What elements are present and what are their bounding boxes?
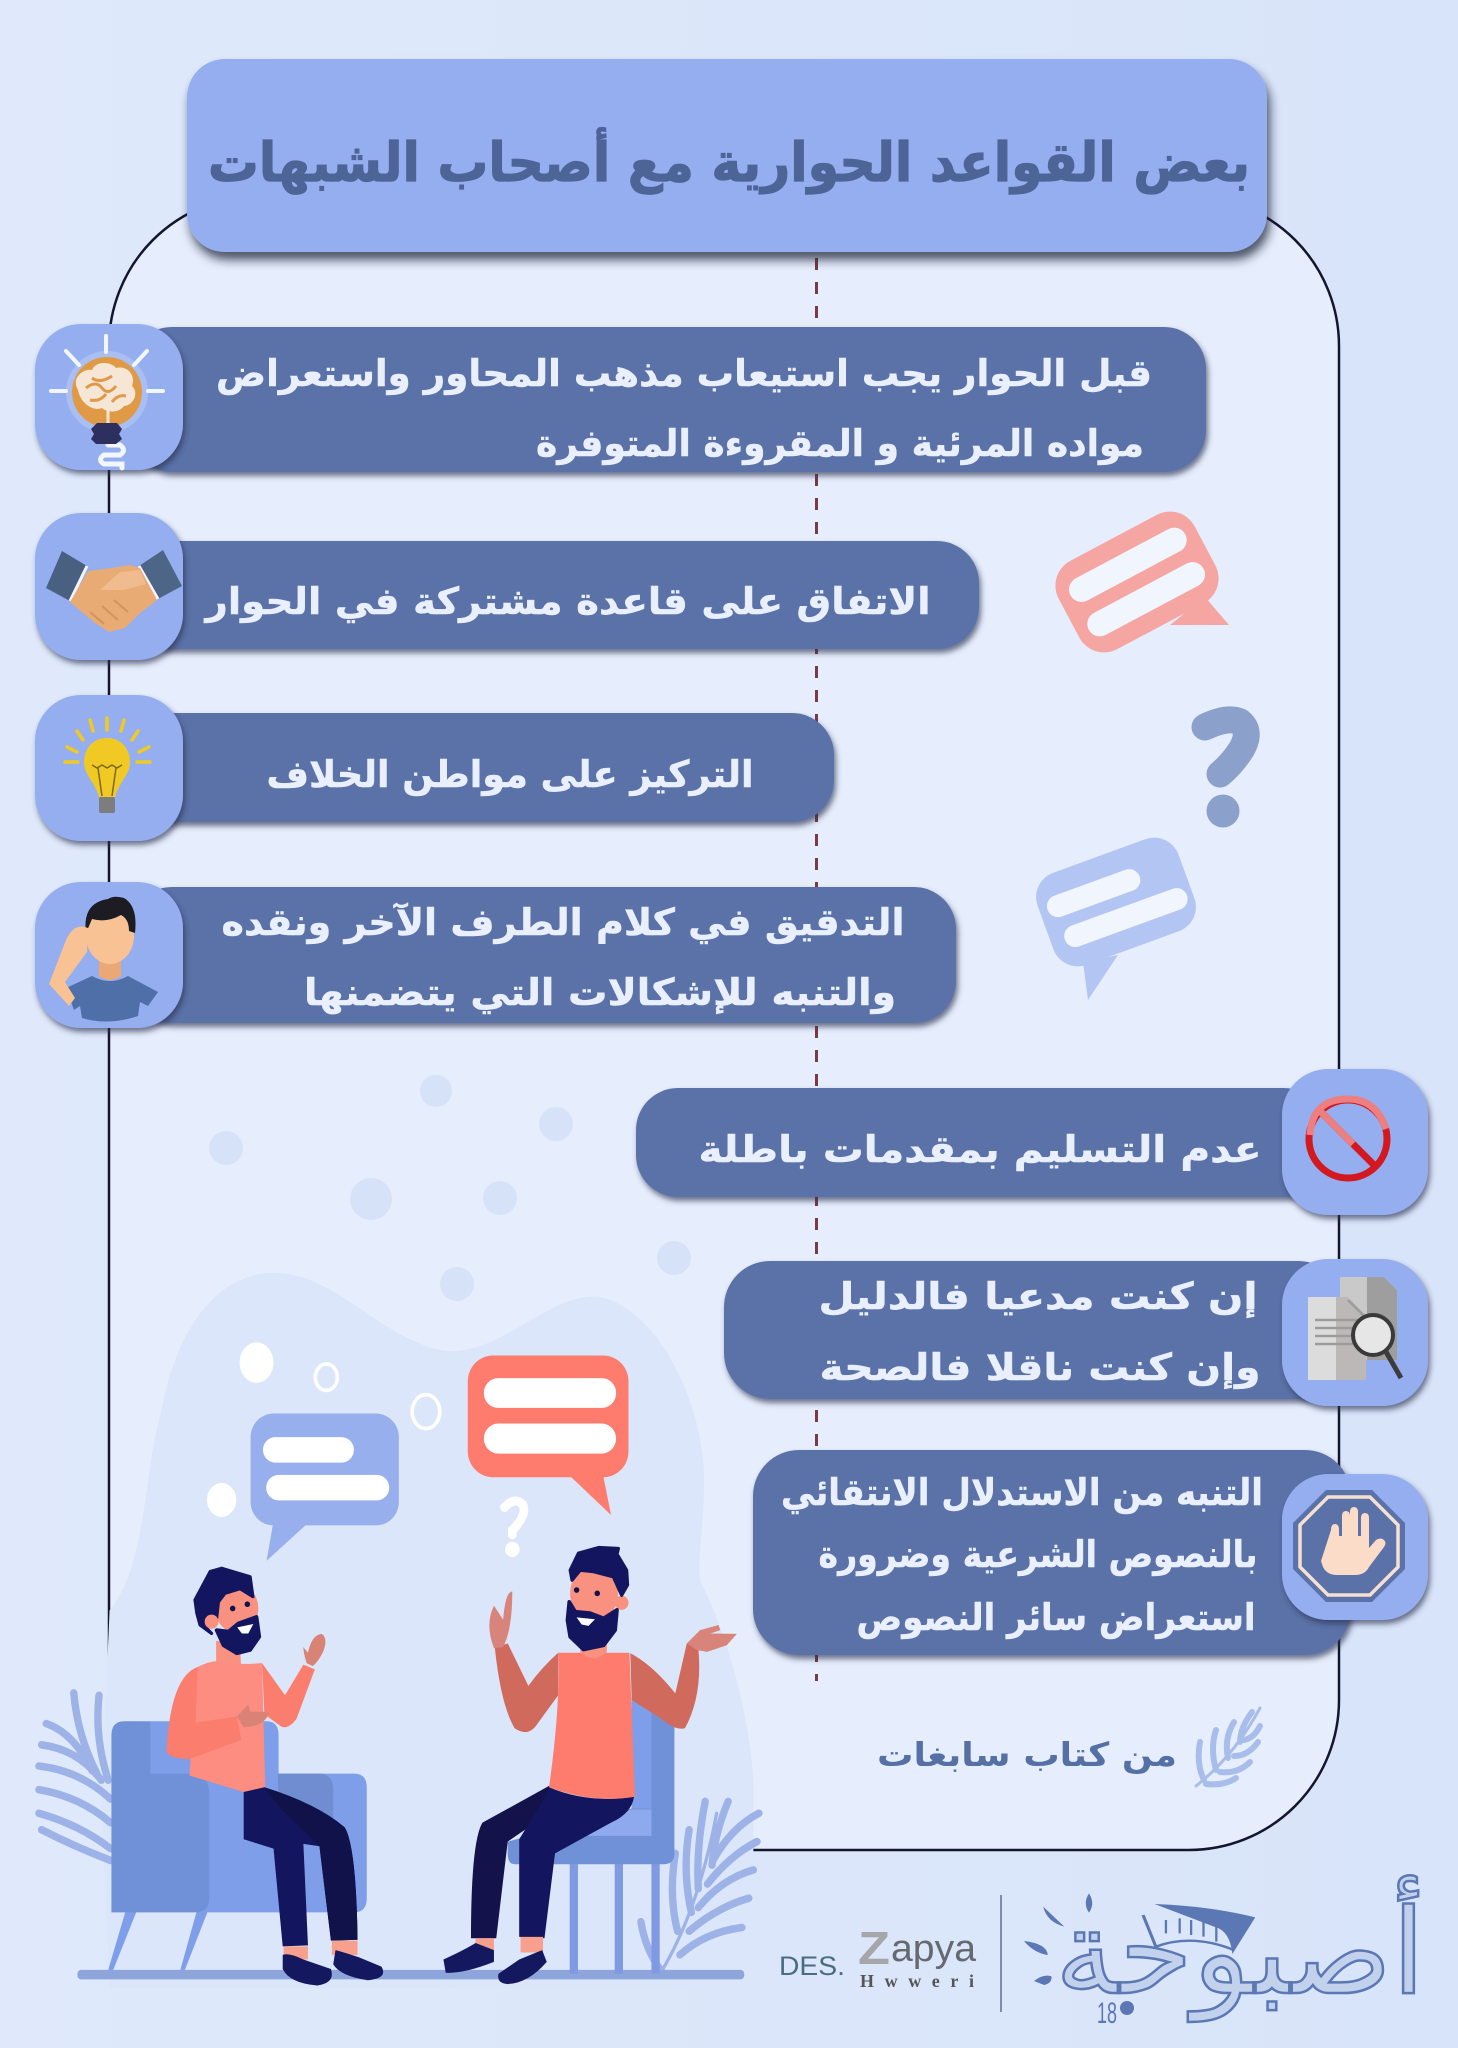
ground line — [77, 1970, 744, 1979]
item 1 — [35, 324, 1206, 472]
item 5 — [636, 1069, 1428, 1215]
icon: thinking person — [35, 882, 183, 1028]
background dots — [209, 1075, 691, 1301]
icon: pink speech bubble — [1046, 502, 1229, 662]
bar 5 — [636, 1088, 1326, 1197]
armchair — [108, 1721, 367, 1970]
speech bubble blue — [251, 1414, 399, 1561]
icon: brain bulb — [35, 324, 183, 470]
icon: documents and magnifier — [1282, 1259, 1428, 1406]
title text: بعض القواعد الحوارية مع أصحاب الشبهات — [208, 127, 1250, 195]
illustration: two men talking — [39, 1273, 759, 1988]
title banner — [187, 59, 1267, 252]
icon: prohibited sign — [1282, 1069, 1428, 1215]
source note — [877, 1708, 1260, 1786]
plant left — [39, 1693, 111, 1860]
item 4 — [35, 882, 956, 1028]
bar 3 — [130, 713, 834, 822]
designer credit: Hwweri — [860, 1971, 980, 1991]
icon: question mark — [1205, 720, 1246, 828]
bar 1 — [130, 327, 1206, 472]
speech bubble coral — [468, 1356, 628, 1515]
chair — [508, 1698, 674, 1974]
bar 3: التركيز على مواطن الخلاف — [266, 753, 754, 796]
bar 7: بالنصوص الشرعية وضرورة — [818, 1533, 1258, 1576]
panel: rounded frame — [109, 196, 1339, 1850]
bubbles and question mark — [207, 1342, 524, 1557]
item 2 — [35, 513, 979, 660]
bar 5: عدم التسليم بمقدمات باطلة — [698, 1128, 1262, 1172]
logo: أصبوحة — [1055, 1875, 1425, 2022]
logo: 18 — [1097, 1997, 1117, 2030]
dashed centre line — [815, 258, 818, 1681]
bar 6: وإن كنت ناقلا فالصحة — [820, 1346, 1260, 1389]
designer credit — [779, 1922, 980, 1991]
icon: feather leaf — [1196, 1708, 1260, 1786]
designer credit: apya — [891, 1928, 977, 1970]
man left — [167, 1568, 383, 1985]
designer credit: DES. — [779, 1951, 845, 1981]
bar 4: التدقيق في كلام الطرف الآخر ونقده — [222, 901, 904, 945]
icon: blue speech bubble — [1029, 830, 1203, 1000]
man right — [443, 1548, 737, 1984]
plant right — [641, 1801, 759, 1971]
bar 6: إن كنت مدعيا فالدليل — [818, 1275, 1258, 1318]
bar 1: قبل الحوار يجب استيعاب مذهب المحاور واستعراض — [216, 352, 1152, 395]
bar 7 — [753, 1450, 1351, 1655]
icon: stop hand — [1282, 1474, 1428, 1620]
item 6 — [724, 1259, 1428, 1406]
backdrop blob — [101, 1273, 753, 1988]
icon: handshake — [35, 513, 183, 660]
bar 7: التنبه من الاستدلال الانتقائي — [781, 1471, 1263, 1514]
bar 6 — [724, 1261, 1344, 1399]
bar 2: الاتفاق على قاعدة مشتركة في الحوار — [203, 580, 930, 623]
bar 7: استعراض سائر النصوص — [856, 1596, 1256, 1639]
bar 1: مواده المرئية و المقروءة المتوفرة — [536, 422, 1144, 465]
designer credit: Z — [858, 1922, 890, 1974]
bar 4: والتنبه للإشكالات التي يتضمنها — [304, 971, 896, 1014]
credits and logo — [779, 1875, 1425, 2030]
bar 4 — [130, 887, 956, 1023]
bar 2 — [130, 541, 979, 649]
item 3 — [35, 695, 834, 841]
source text: من كتاب سابغات — [877, 1735, 1177, 1775]
icon: light bulb — [35, 695, 183, 841]
vertical divider — [1000, 1895, 1002, 2012]
item 7 — [753, 1450, 1428, 1655]
